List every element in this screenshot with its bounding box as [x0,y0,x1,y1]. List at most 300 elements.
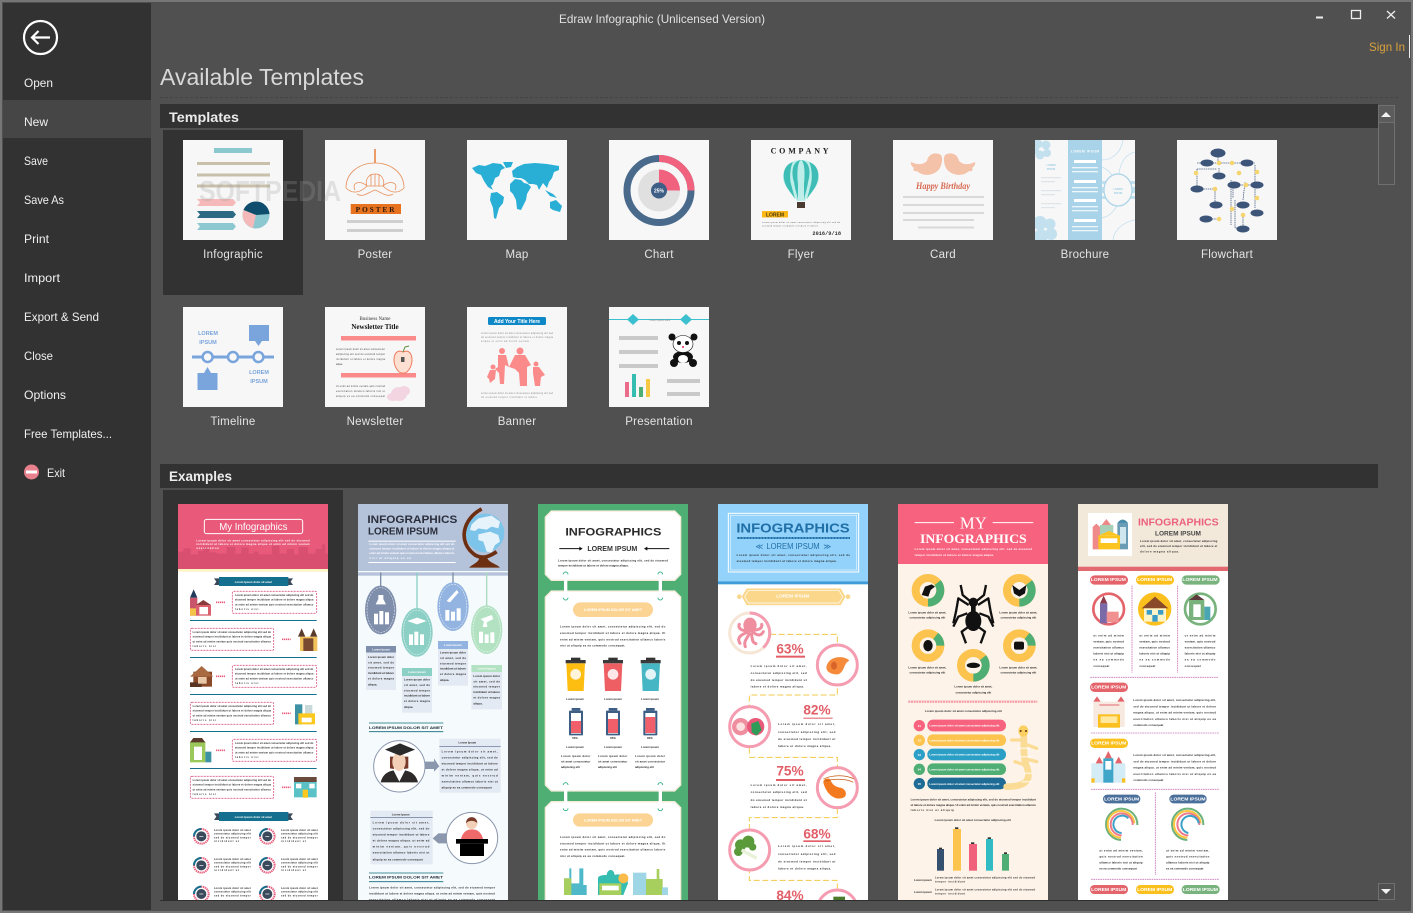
poster 2 tag captions: Lorem Ipsum [408,670,426,674]
poster 3 batteries: Lorem ipsum dolor [635,754,666,758]
template: Banner: aliqua ut enim ad minim veniam [481,340,529,343]
poster 4 header: ≪ [755,542,763,551]
poster 2 tag captions: aliqua. [404,705,414,709]
poster 5 bar chart [937,827,1009,871]
poster 6 row one: magna aliqua. ut enim ad minim veniam, quis nostrud [1133,711,1216,715]
poster 6 column captions: ut enim ad minim [1139,633,1170,637]
poster 2 section heading [369,723,444,732]
poster 3 batteries: Lorem ipsum dolor [598,754,628,758]
template: Flyer: 2016/9/18 [812,231,841,237]
poster 3 batteries: adipiscing elit [635,765,654,769]
poster 5 donut captions: consectetur adipiscing elit [955,691,991,695]
poster 6 bottom pills [1090,885,1220,894]
poster 3 batteries: sit amet consectetur [598,759,628,763]
poster 5 legend: Lorem ipsum dolor sit amet consectetur adipiscing elit sed do eiusmod [935,876,1035,879]
poster 1 ring captions: sed do eiusmod tempor [214,865,251,868]
poster 1 ring captions: sed do eiusmod tempor [281,894,318,897]
icon: back arrow [24,21,57,54]
poster 6 column captions: exercitation ullamco [1185,645,1216,649]
window controls [1316,10,1395,18]
poster 6 dashed dividers [1090,586,1219,879]
poster 1 box text: laboris nisi [193,719,216,722]
poster 1 ring captions: consectetur adipiscing elit [214,833,251,836]
poster 5 list pills: 03 [918,753,921,757]
poster 6 column captions: laboris nisi ut aliquip [1185,651,1216,655]
template: Chart [609,140,709,261]
poster 6 top pills [1090,575,1220,585]
poster 5 list pills: 04 [918,768,921,772]
window title: Edraw Infographic (Unlicensed Version) [559,12,765,26]
poster 6 row one: commodo consequat [1133,723,1163,727]
poster 4 captions: Lorem ipsum dolor sit amet, [778,844,836,848]
icon: exit [24,464,39,480]
poster 3 heading [558,527,669,567]
template: Newsletter: aliqua [336,363,343,366]
template: Newsletter: Lorem ipsum dolor sit amet consectetur [336,348,385,351]
poster 6 row one [1090,683,1216,728]
poster 5 donut insects [922,584,1026,668]
poster 1 box text: ut enim ad minim veniam quis nostrud exercitation ullamco [235,751,314,754]
poster 4 dashed connectors [749,634,837,900]
poster 2 header: LOREM IPSUM [368,527,438,538]
poster 4 captions: do eiusmod tempor incididunt ut [778,737,835,741]
poster 3 paragraph 2 [560,835,666,858]
poster 2 tag captions: sit amet, sed do [440,656,466,660]
poster 3 recycle bins: Lorem ipsum [566,697,584,701]
poster 1 ring captions: Lorem ipsum dolor sit amet [281,829,318,832]
poster 3 heading: Lorem ipsum dolor sit amet, consectetur adipiscing elit, sed do eiusmod [558,558,668,562]
speaker text card: Lorem Ipsum [392,812,410,816]
poster 1 box text: eiusmod tempor incididunt ut labore et dolore magna aliqua [235,599,314,602]
poster 1 header: Lorem ipsum dolor sit amet consectetur adipiscing elit sed do eiusmod [196,538,310,542]
poster 1 box text: laboris nisi [235,608,259,611]
graduate text card: et dolore magna aliqua. ut enim ad [442,767,498,771]
poster 1 box text: Lorem ipsum dolor sit amet consectetur adipiscing elit sed do [235,594,314,597]
poster 4 captions: consectetur adipiscing elit, sed [778,852,836,856]
template: Infographic [183,140,283,261]
poster 5 paragraph: Lorem ipsum dolor sit amet, consectetur adipiscing elit, sed do eiusmod tempor incididunt [911,797,1036,801]
graduate text card [439,739,501,793]
poster 5 donut captions: Lorem ipsum dolor sit amet, [908,611,946,615]
poster 5 header [898,504,1048,564]
poster 4 captions: consectetur adipiscing elit, sed [751,671,807,675]
poster 1 box text: eiusmod tempor incididunt ut labore et dolore magna aliqua [235,673,314,676]
poster 2 section heading: LOREM IPSUM DOLOR SIT AMET [369,726,444,730]
example poster 1: My Infographics [178,504,328,904]
menu item: Options: Options [24,388,66,402]
menu item: Save: Save [24,154,48,168]
template: Banner [467,307,567,428]
poster 5 list pills: Lorem ipsum dolor sit amet consectetur adipiscing elit [929,767,999,771]
poster 6 row two [1090,739,1216,783]
poster 6 header: elit, sed do eiusmod tempor incididunt ut labore et [1140,544,1217,548]
poster 6 column captions: laboris nisi ut aliquip [1093,651,1124,655]
speaker text card [370,811,433,864]
poster 6 header [1078,504,1228,571]
poster 4 captions [751,664,836,870]
poster 1 ring captions: consectetur adipiscing elit [214,862,251,865]
poster 2 footer section [369,873,496,901]
poster 5 list pills: 05 [918,782,921,786]
template: Card [893,140,993,261]
template: Poster: POSTER [356,205,396,214]
poster 5 list heading: Lorem ipsum dolor sit amet consectetur adipiscing elit [925,709,1002,713]
poster 4 header: eiusmod tempor incididunt ut labore et dolore magna aliqua. [737,559,837,563]
poster 1 box text [193,594,314,796]
menu item: Free Templates: Free Templates... [24,427,112,441]
poster 1 ring captions: consectetur adipiscing elit [281,862,318,865]
example poster 4: blue Infographics [718,504,868,913]
poster 3 paragraph 1: nisi ut aliquip ex ea commodo consequat. [560,643,626,647]
speaker text card: et dolore magna aliqua. ut enim ad [373,839,430,843]
template: Chart: Chart [644,249,674,261]
template: Timeline: IPSUM [250,379,268,385]
poster 1 box text: eiusmod tempor incididunt ut labore et dolore magna aliqua [193,784,272,787]
poster 3 connectors [564,578,662,804]
template: Card: Card [930,249,956,261]
poster 1 ring icons [194,829,275,901]
template: Brochure: IPSUM [1114,191,1122,195]
icon: globe [464,509,504,568]
poster 5 header: tempor incididunt ut labore et dolore magna aliqua. [915,553,994,557]
template: Brochure: IPSUM [1047,167,1055,171]
poster 5 list pills: 02 [918,739,921,743]
poster 5 donut captions: consectetur adipiscing elit [909,616,945,620]
poster 3 batteries: Lorem ipsum [641,745,659,749]
poster 6 ring charts: ut enim ad minim veniam, [1166,848,1210,852]
poster 2 tag captions: et dolore magna [440,672,466,676]
poster 6 column captions: ut enim ad minim [1185,633,1216,637]
poster 1 box text: eiusmod tempor incididunt ut labore et dolore magna aliqua [193,636,272,639]
speaker text card: Lorem ipsum dolor sit amet, [373,821,430,825]
poster 6 column captions: consequat [1185,664,1201,668]
poster 4 captions: labore et dolore magna aliqua. [778,866,832,870]
poster 6 ring charts: ex ea commodo consequat [1166,867,1203,871]
examples gallery [178,504,1228,913]
speaker portrait [433,812,498,864]
poster 5 legend: tempor incididunt [935,880,965,883]
poster 1 box text: laboris nisi [193,645,216,648]
poster 1 ring captions: Lorem ipsum dolor sit amet [214,829,251,832]
poster 2 header: Lorem ipsum dolor sit amet consectetur adipiscing elit sed do [369,542,455,546]
poster 3 batteries: 65% [610,736,616,740]
poster 2 header: INFOGRAPHICS [367,514,458,526]
poster 5 donut captions: Lorem ipsum dolor sit amet, [908,666,946,670]
poster 1 ring captions: Lorem ipsum dolor sit amet [281,887,318,890]
poster 1 header: incididunt ut labore et dolore magna aliqua ut enim ad minim veniam [196,542,310,546]
poster 1 box text: Lorem ipsum dolor sit amet consectetur adipiscing elit sed do [193,779,271,782]
poster 4 captions: consectetur adipiscing elit, sed [778,730,836,734]
poster 6 ring charts: LOREM IPSUM [1170,797,1206,803]
poster 6 row two: sed do eiusmod tempor incididunt ut labore et dolore [1133,759,1216,763]
poster 6 row two: magna aliqua. ut enim ad minim veniam, quis nostrud [1133,766,1216,770]
poster 4 captions: labore et dolore magna aliqua. [751,685,804,689]
poster 2 tag captions: Lorem Ipsum [478,667,496,671]
poster 5 donut captions: Lorem ipsum dolor sit amet, [999,611,1037,615]
poster 1 ribbons: Lorem Ipsum dolor sit amet [235,815,272,819]
poster 5 legend: Lorem ipsum [914,890,932,894]
template: Banner: Banner [498,416,536,428]
graduate text card: eiusmod tempor incididunt ut labore [442,761,498,765]
selected menu row [3,100,151,138]
poster 4 header: ≫ [823,542,831,551]
template: Brochure: Brochure [1061,249,1109,261]
menu item: New: New [24,115,48,129]
poster 4 captions: Lorem ipsum dolor sit amet, [751,664,807,668]
poster 5 paragraph: ut labore et dolore magna aliqua. Ut enim ad minim veniam, quis nostrud exercitation ullamco [911,803,1036,807]
poster 1 ring captions: incididunt ut [214,840,239,843]
poster 4 percentages: 63% [776,642,804,657]
template: Brochure: LOREM [1113,187,1123,191]
poster 2 tag captions: aliqua. [368,682,378,686]
poster 1 ring captions: sed do eiusmod tempor [281,836,318,839]
template: Timeline: LOREM [249,370,269,376]
poster 3 recycle bins: Lorem ipsum [604,697,622,701]
poster 2 tag captions: eiusmod tempor [473,685,501,689]
poster 5 list pills: 01 [918,724,921,728]
menu item: Save As: Save As [24,193,64,207]
poster 2 header: nisi ut aliquip ex ea [369,556,411,560]
poster 2 header: enim ad minim veniam quis nostrud exercitation ullamco laboris [369,551,455,555]
poster 2 tag captions: et dolore magna [473,695,500,699]
poster 1 ring captions: incididunt ut [281,869,306,872]
template: Brochure: LOREM IPSUM [1071,150,1099,154]
template: Flyer [751,140,851,261]
poster 1 ring captions: sed do eiusmod tempor [281,865,318,868]
example poster 3: green Infographics [538,504,688,905]
poster 6 top pills: LOREM IPSUM [1091,577,1126,583]
poster 4 percentages: 68% [803,826,831,841]
poster 6 column captions: laboris nisi ut aliquip [1139,651,1170,655]
poster 2 footer section: incididunt ut labore et dolore magna aliqua. ut enim ad minim veniam, quis nostrud [369,891,495,895]
poster 1 box text: ut enim ad minim veniam quis nostrud exercitation ullamco [193,714,271,717]
poster 6 header: INFOGRAPHICS [1138,517,1219,528]
template: Banner: do eiusmod tempor incididunt ut labore et dolore magna [481,336,554,339]
poster 5 paragraph [911,797,1036,822]
poster 5 legend: Lorem ipsum dolor sit amet consectetur adipiscing elit sed do eiusmod [935,888,1035,891]
poster 4 item icons [730,613,857,913]
poster 1 box text: laboris nisi [235,756,259,759]
poster 4 header: Lorem ipsum dolor sit amet, consectetur adipiscing elit, sed do [737,553,850,557]
poster 4 captions: Lorem ipsum dolor sit amet, [751,783,807,787]
poster 6 column captions: veniam, quis nostrud [1185,639,1216,643]
poster 2 tag captions: et dolore magna [404,699,430,703]
poster 5 paragraph: laboris nisi ut aliquip [911,808,954,812]
poster 6 bottom pills: LOREM IPSUM [1183,887,1218,893]
poster 5 list pills: Lorem ipsum dolor sit amet consectetur adipiscing elit [929,782,999,786]
poster 6 ring charts: quis nostrud exercitation [1166,854,1210,858]
poster 5 header: MY [960,514,987,533]
poster 6 ring charts: ullamco laboris nisi ut aliquip [1166,860,1210,864]
template: Newsletter: adipiscing elit sed do eiusmod tempor [336,353,385,356]
poster 6 ring charts: ut enim ad minim veniam, [1099,848,1143,852]
poster 3 heading: tempor incididunt ut labore et dolore magna aliqua. [558,563,629,567]
poster 5 donut captions: consectetur adipiscing elit [909,671,945,675]
poster 3 batteries: Lorem ipsum dolor [561,754,591,758]
poster 6 column captions: ex ea commodo [1139,658,1170,662]
template: Banner: Add Your Title Here [494,319,540,325]
section header: Templates [160,104,1378,128]
poster 6 round icons [1093,592,1216,626]
poster 2 tag captions: Lorem Ipsum [444,643,462,647]
poster 5 donut captions: consectetur adipiscing elit [1000,616,1036,620]
poster 6 bottom pills: LOREM IPSUM [1137,887,1172,893]
poster 1 ribbons: Lorem Ipsum dolor sit amet [235,580,272,584]
poster 6 row two: commodo consequat [1133,778,1163,782]
poster 6 column captions [1093,633,1216,668]
icon: spider [953,585,993,643]
sidebar menu [3,3,151,910]
poster 6 top pills: LOREM IPSUM [1137,577,1172,583]
poster 6 column captions: exercitation ullamco [1093,645,1124,649]
poster 1 box text: Lorem ipsum dolor sit amet consectetur adipiscing elit sed do [235,668,314,671]
menu item: Exit: Exit [47,466,66,480]
sign in link: Sign In [1369,40,1405,54]
poster 6 row one: LOREM IPSUM [1091,685,1126,691]
poster 1 ring captions: sed do eiusmod tempor [214,836,251,839]
poster 3 batteries: 50% [572,736,578,740]
poster 1 box text: Lorem ipsum dolor sit amet consectetur adipiscing elit sed do [193,705,271,708]
watermark: SOFTPEDIA [199,176,341,208]
poster 2 tag captions [366,641,502,713]
scroll up arrow [1381,112,1391,117]
poster 2 footer section: Lorem ipsum dolor sit amet, consectetur adipiscing elit, sed do eiusmod tempor [369,885,496,889]
poster 4 captions: Lorem ipsum dolor sit amet, [778,722,836,726]
example poster 5: My Infographics pink [898,504,1048,904]
poster 6 column captions: ut enim ad minim [1093,633,1124,637]
template: Timeline: Timeline [210,416,256,428]
example poster 6: city Infographics [1078,504,1228,904]
poster 5 list pills: Lorem ipsum dolor sit amet consectetur adipiscing elit [929,724,999,728]
template: Newsletter: exercitation ullamco laboris nisi ut [336,390,385,393]
poster 2 tag captions: Lorem ipsum dolor [440,651,467,655]
template: Flowchart: Flowchart [1201,249,1254,261]
template: Chart: 25% [654,188,665,194]
poster 6 row one: sed do eiusmod tempor incididunt ut labore et dolore [1133,704,1216,708]
poster 3 paragraph 2: enim ad minim veniam, quis nostrud exercitation ullamco laboris [560,848,666,852]
poster 1 dashed text boxes [190,591,317,798]
poster 2 tag captions: sit amet, sed do [368,660,394,664]
icon: gecko [1007,725,1037,787]
poster 3 pill 1 [573,602,653,617]
poster 3 batteries: sit amet consectetur [635,759,666,763]
poster 6 column captions: exercitation ullamco [1139,645,1170,649]
poster 1 ribbons [214,577,293,821]
poster 5 donut captions: Lorem ipsum dolor sit amet, [999,666,1037,670]
poster 3 batteries: 80% [647,736,653,740]
poster 3 recycle bins: Lorem ipsum [641,697,659,701]
poster 1 ring captions: consectetur adipiscing elit [281,891,318,894]
poster 2 tag captions: incididunt ut labore [368,671,394,675]
poster 1 ring captions: Lorem ipsum dolor sit amet [281,858,318,861]
poster 2 tag captions: incididunt ut labore [440,667,466,671]
poster 3 paragraph 2: nisi ut aliquip ex ea commodo consequat. [560,854,626,858]
poster 6 ring charts: LOREM IPSUM [1104,797,1139,803]
template: Newsletter: Ut enim ad minim veniam quis nostrud [336,385,386,388]
poster 5 donut captions [908,611,1037,695]
poster 1 ring captions: incididunt ut [281,840,306,843]
graduate text card: aliquip ex ea commodo consequat [442,785,492,789]
template: Card: Happy Birthday [915,181,971,191]
template: Map: Map [505,249,529,261]
template: Map [467,140,567,261]
template: Banner: do eiusmod tempor incididunt ut labore [481,396,538,399]
poster 6 column captions: consequat [1139,664,1155,668]
template: Newsletter: Newsletter [347,416,403,428]
menu item: Print: Print [24,232,50,246]
poster 3 batteries: sit amet consectetur [561,759,591,763]
poster 2 tag captions: sit amet, sed do [404,683,430,687]
poster 5 list pills [914,720,1006,789]
template: Timeline: IPSUM [199,340,217,346]
poster 6 row two: LOREM IPSUM [1091,741,1126,747]
poster 4 captions: do eiusmod tempor incididunt ut [751,798,807,802]
poster 2 hanging tags [365,572,502,657]
poster 3 paragraph 2: eiusmod tempor incididunt ut labore et dolore magna aliqua. Ut [560,841,665,845]
poster 3 white panels [545,511,681,905]
poster 2 tag captions: aliqua. [473,701,483,705]
poster 6 row two: Lorem ipsum dolor sit amet, consectetur adipiscing elit, [1133,753,1216,757]
poster 2 tag captions: sit amet, sed do [473,679,500,683]
poster 4 header [718,504,868,584]
example poster 2: Infographics Lorem Ipsum [358,504,508,904]
scrollbar [1378,106,1394,900]
poster 1 small arrows [216,602,291,787]
poster 4 header: LOREM IPSUM [766,542,820,551]
selected template tile [163,130,303,295]
poster 2 tag captions: et dolore magna [368,676,394,680]
poster 3 heading: LOREM IPSUM [587,546,638,553]
poster 3 heading: INFOGRAPHICS [565,527,662,539]
poster 4 percentages: 82% [803,703,831,718]
poster 6 column captions: veniam, quis nostrud [1139,639,1170,643]
poster 1 box text: ut enim ad minim veniam quis nostrud exercitation ullamco [193,788,271,791]
template: Brochure: LOREM [1046,163,1056,167]
template: Poster [325,140,425,261]
speaker text card: exercitation ullamco laboris nisi ut [373,851,429,855]
poster 1 ring captions: consectetur adipiscing elit [214,891,251,894]
poster 1 building icons [190,589,317,798]
poster 6 row one: Lorem ipsum dolor sit amet, consectetur adipiscing elit, [1133,698,1216,702]
poster 2 tag captions: Lorem ipsum dolor [368,655,395,659]
graduate portrait [374,741,439,792]
template: Flyer: Lorem ipsum dolor sit amet consectetur adipiscing elit sed do [762,221,841,224]
poster 3 paragraph 2: Lorem ipsum dolor sit amet, consectetur adipiscing elit, sed do [560,835,666,839]
poster 4 captions: do eiusmod tempor incididunt ut [778,859,835,863]
poster 5 paragraph: Lorem ipsum dolor sit amet consectetur adipiscing elit [935,818,1011,822]
template: Newsletter: aliquip ex ea commodo consequat [336,395,385,398]
menu item: Import: Import [24,271,61,285]
poster 1 header: My Infographics [219,522,288,533]
poster 3 batteries: Lorem ipsum [566,745,584,749]
poster 6 column captions: ex ea commodo [1185,658,1216,662]
template: Banner: Lorem ipsum dolor sit amet consectetur adipiscing elit sed [481,392,554,395]
poster 2 tag captions: eiusmod tempor [440,661,467,665]
poster 4 header: INFOGRAPHICS [736,522,850,536]
poster 2 tag captions: incididunt ut labore [473,690,500,694]
poster 4 percentages: 75% [776,764,804,779]
poster 1 box text: eiusmod tempor incididunt ut labore et dolore magna aliqua [193,710,272,713]
poster 4 captions: labore et dolore magna aliqua. [778,744,832,748]
poster 2 tag captions: eiusmod tempor [404,688,431,692]
template: Newsletter: Business Name [360,317,391,322]
template: Presentation [609,307,709,428]
poster 2 header [358,504,508,576]
poster 6 ring charts [1099,795,1210,871]
template: Newsletter: incididunt ut labore et dolore magna [336,358,386,361]
template: Timeline: LOREM [198,331,218,337]
poster 2 tag captions: aliqua. [440,678,450,682]
